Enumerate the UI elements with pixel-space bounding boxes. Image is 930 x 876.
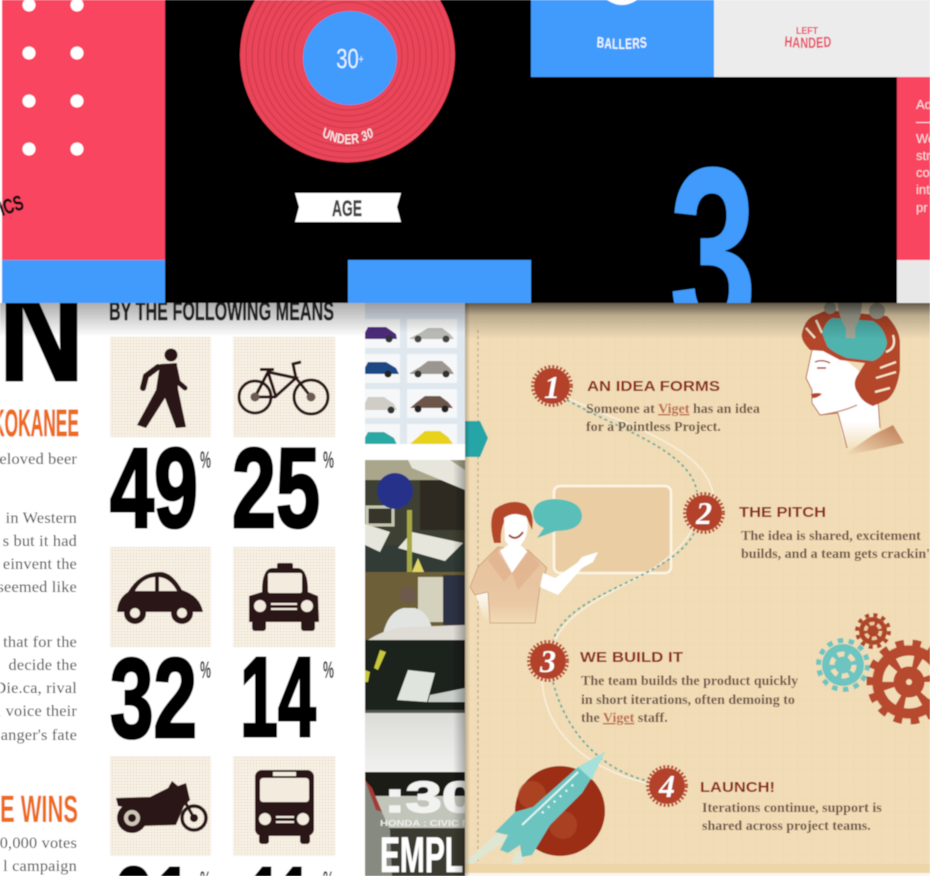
heading: WE BUILD IT	[580, 649, 683, 666]
car: navy	[362, 362, 399, 378]
panel: red demographics block	[0, 0, 165, 260]
car: purple	[362, 327, 397, 342]
article text, second paragraph: anger's fate	[1, 725, 77, 744]
badge 2: 2	[695, 495, 712, 531]
badge 4: 4	[658, 768, 675, 804]
heading: THE PITCH	[739, 504, 826, 521]
description: The idea is shared, excitement	[741, 529, 921, 544]
car: brown	[410, 396, 453, 412]
illustration: woman presenting	[470, 499, 598, 623]
photo caption: :30: :30	[384, 773, 478, 822]
board: blank pitch card	[554, 486, 671, 573]
description	[581, 674, 798, 726]
heading: LAUNCH!	[700, 779, 775, 796]
description	[702, 801, 882, 834]
teal hexagon tab	[465, 421, 488, 457]
rocket body	[495, 752, 605, 857]
panel: print article with transport statistics	[0, 244, 365, 876]
panel: red text block, cropped: pr	[916, 200, 928, 215]
statistic: 49 percent: %	[200, 447, 211, 474]
hair	[491, 502, 533, 543]
white car roof, windscreen and hood	[365, 625, 465, 642]
blue block lower centre	[348, 260, 531, 303]
exhaust trails	[465, 833, 526, 864]
article text, second paragraph: decide the	[9, 655, 77, 674]
statistic: 32 percent: %	[200, 657, 211, 684]
statistic: 11 percent, cropped	[254, 866, 332, 876]
orange heading: wins: E WINS	[0, 789, 78, 831]
statistic: 14 percent: 14	[240, 634, 316, 760]
panel: car colour swatches	[362, 303, 465, 448]
badge 4	[648, 766, 686, 806]
gear: small red	[857, 615, 889, 647]
description: the Viget staff.	[581, 711, 668, 726]
description: in short iterations, often demoing to	[581, 693, 795, 708]
panel: left handed: LEFT	[796, 26, 818, 37]
article text, second paragraph	[0, 632, 77, 744]
panel: ballers: BALLERS	[596, 36, 648, 50]
statistic: 25 percent	[232, 446, 334, 530]
description: Someone at Viget has an idea	[586, 402, 760, 417]
car: white	[362, 397, 397, 414]
label: 30+: 30	[336, 44, 359, 75]
ribbon: age: AGE	[332, 196, 362, 221]
badge 3	[528, 642, 568, 680]
blouse	[470, 547, 547, 623]
tile: car icon	[110, 547, 211, 647]
panel: red text block, cropped: co	[916, 165, 930, 180]
ribbon: age	[295, 193, 401, 222]
illustration: woman with idea	[802, 302, 904, 455]
gear: teal	[818, 640, 868, 690]
chart: age record donut	[239, 0, 456, 164]
description: shared across project teams.	[702, 819, 871, 834]
badge 1	[532, 366, 572, 406]
gear: large red	[870, 643, 930, 721]
light bulbs	[824, 302, 885, 338]
panel: left handed	[713, 0, 930, 78]
blue block lower left	[2, 260, 165, 303]
car: teal	[362, 432, 397, 445]
tile: pedestrian icon	[110, 337, 211, 437]
person in white shirt	[383, 608, 433, 634]
panel: colour block dashboard	[0, 0, 930, 304]
shoulder	[847, 425, 904, 455]
statistic: 14 percent: %	[323, 657, 334, 684]
description: The team builds the product quickly	[581, 674, 798, 689]
statistic: 21 percent, cropped	[118, 864, 210, 876]
big numeral 3: 3	[669, 116, 757, 389]
article text, third paragraph	[0, 833, 77, 875]
step 3: we build it	[528, 642, 798, 726]
step 4: launch	[648, 766, 882, 834]
tile: bus icon	[233, 756, 335, 856]
step 1: an idea forms	[532, 366, 760, 435]
article text, first paragraph: einvent the	[3, 554, 77, 573]
heading: by the following means: BY THE FOLLOWING MEANS	[109, 296, 334, 326]
speech bubble	[533, 499, 582, 538]
pointing arm	[540, 552, 598, 595]
white ceiling panels	[365, 460, 465, 561]
chest	[498, 540, 528, 573]
brain shape	[822, 318, 887, 361]
face	[504, 514, 528, 547]
hair	[802, 310, 900, 406]
face and neck	[806, 350, 880, 452]
statistic: 14 percent	[242, 656, 334, 738]
description	[586, 402, 760, 435]
badge 1: 1	[544, 369, 560, 405]
connecting path: white line	[542, 395, 714, 784]
step 2: the pitch	[684, 494, 930, 562]
statistic: 49 percent	[109, 446, 212, 530]
statistic: 25 percent: 25	[232, 425, 320, 551]
panel: Viget pointless project process	[465, 302, 930, 876]
photo caption: Honda Civic: HONDA : CIVIC N	[380, 818, 470, 828]
badge 2	[684, 494, 724, 532]
illustration: planet and rocket	[465, 752, 605, 864]
label: 30+: +	[359, 54, 364, 66]
grey block lower right	[897, 260, 930, 303]
article text, first paragraph: eloved beer	[0, 449, 77, 468]
heading: AN IDEA FORMS	[587, 378, 720, 395]
description: builds, and a team gets crackin'	[741, 547, 930, 562]
statistic: 25 percent: %	[323, 447, 334, 474]
panel: left handed: HANDED	[784, 36, 832, 48]
dot grid	[22, 0, 84, 156]
left arm	[475, 588, 492, 622]
label: under 30: UNDER 30	[322, 127, 374, 145]
panel: red text block, cropped: int	[916, 182, 930, 197]
facial features	[815, 361, 830, 368]
statistic: 32 percent	[110, 656, 212, 741]
planet	[515, 766, 605, 856]
car: silver	[410, 328, 454, 342]
car: yellow	[410, 431, 453, 444]
photo: car assembly line with employee	[365, 460, 478, 876]
panel: ballers	[530, 0, 715, 78]
tile: bicycle icon	[233, 337, 335, 437]
tile: taxi icon	[233, 547, 335, 647]
article text, first paragraph: s but it had	[3, 531, 77, 550]
illustration: gears	[818, 615, 930, 721]
blue duct	[377, 473, 413, 509]
badge 3: 3	[539, 643, 556, 679]
article text, first paragraph: in Western	[6, 508, 77, 527]
description	[741, 529, 930, 562]
description: for a Pointless Project.	[586, 420, 721, 435]
description: Iterations continue, support is	[702, 801, 882, 816]
statistic: 49 percent: 49	[110, 425, 198, 551]
car: grey	[410, 361, 454, 378]
panel: red text block, cropped	[897, 77, 930, 260]
large letter N: N	[0, 244, 84, 412]
article text, first paragraph	[0, 449, 77, 596]
connecting path: teal dashed line	[553, 400, 697, 781]
statistic: 32 percent: 32	[110, 635, 197, 761]
article text, second paragraph: that for the	[3, 632, 77, 651]
article text, third paragraph: l campaign	[3, 856, 77, 875]
article text, third paragraph: 0,000 votes	[0, 833, 77, 852]
tile: motorcycle icon	[110, 756, 211, 856]
